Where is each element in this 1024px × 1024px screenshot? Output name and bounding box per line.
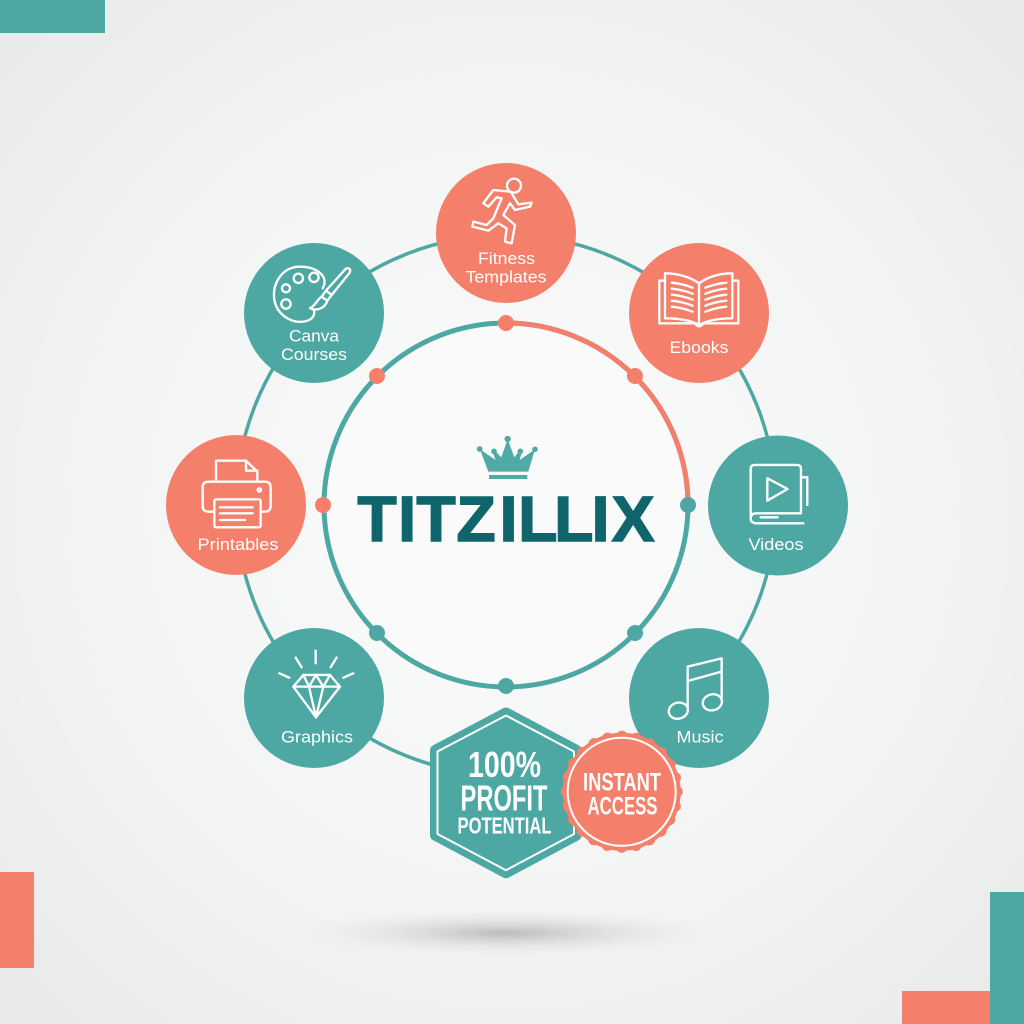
badge: 100% profit potential — [436, 714, 576, 872]
panel: music — [629, 628, 769, 768]
badge text: access: ACCESS — [588, 792, 658, 820]
badge text: instant: INSTANT — [583, 769, 661, 797]
panel: printables — [166, 435, 306, 575]
panel: canva courses — [244, 243, 384, 383]
icon: video book — [751, 465, 807, 523]
panel: ebooks — [629, 243, 769, 383]
icon: music note — [667, 658, 724, 721]
label: printables: Printables — [198, 536, 278, 554]
panel: graphics — [244, 628, 384, 768]
label: fitness: Fitness — [478, 250, 535, 268]
badge text: profit: PROFIT — [460, 778, 548, 819]
label: videos: Videos — [748, 536, 804, 554]
label: music: Music — [676, 728, 724, 746]
title: TITZILLIX — [358, 483, 655, 555]
panel: fitness templates — [436, 163, 576, 303]
label: ebooks: Ebooks — [670, 339, 728, 357]
badge text: potential: POTENTIAL — [458, 812, 552, 838]
icon: diamond — [279, 651, 353, 717]
label: graphics: Graphics — [281, 728, 353, 746]
panel: videos — [708, 436, 848, 576]
icon: printer — [203, 461, 271, 527]
label: courses: Courses — [281, 346, 347, 364]
ground shadow — [291, 909, 721, 957]
icon: runner — [472, 179, 532, 243]
icon: crown — [477, 436, 538, 479]
icon: palette and brush — [274, 267, 350, 322]
outer connecting ring — [236, 235, 776, 775]
inner ring — [324, 323, 688, 687]
icon: open book — [659, 273, 738, 326]
label: canva: Canva — [289, 328, 340, 346]
label: templates: Templates — [466, 268, 546, 286]
badge text: 100%: 100% — [468, 744, 541, 785]
badge: instant access — [563, 733, 681, 851]
ring node dots — [315, 315, 696, 694]
